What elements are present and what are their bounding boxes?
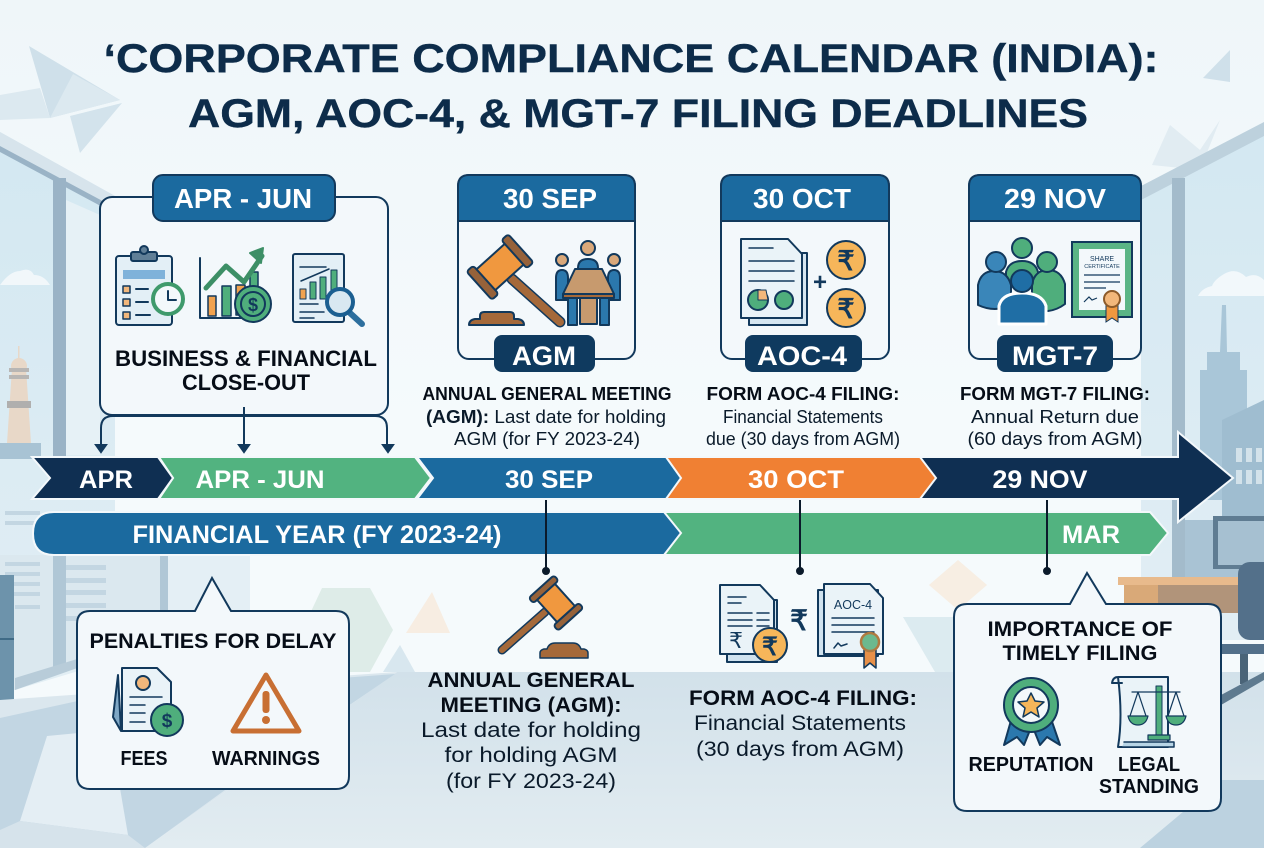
text: AOC-4 detail: Financial Statements bbox=[694, 712, 906, 735]
icon: plus and rupee coins: ₹ bbox=[837, 246, 855, 276]
arrows: close-out bracket to timeline bbox=[96, 407, 393, 452]
panel: business and financial close-out bbox=[100, 175, 388, 415]
icon: warning triangle bbox=[233, 675, 299, 731]
badge: AGM bbox=[494, 335, 595, 372]
panel: AOC-4 card bbox=[721, 175, 889, 372]
label: reputation: REPUTATION bbox=[968, 754, 1094, 776]
icon: share certificate: SHARE bbox=[1090, 256, 1114, 263]
heading: importance: IMPORTANCE OF bbox=[988, 618, 1173, 641]
text: MGT-7 description: (60 days from AGM) bbox=[968, 429, 1142, 449]
text: AOC-4 description: due (30 days from AGM) bbox=[706, 429, 900, 449]
segment: apr: APR bbox=[79, 466, 133, 494]
segment: 30 oct: 30 OCT bbox=[748, 466, 844, 494]
badge: AGM: AGM bbox=[512, 341, 576, 371]
lighthouse bbox=[7, 346, 31, 443]
text: AOC-4 description bbox=[706, 384, 900, 449]
panel: AGM card bbox=[458, 175, 635, 372]
icon: legal scales bbox=[1112, 677, 1186, 747]
left lower window bbox=[0, 555, 250, 690]
text: MGT-7 description: Annual Return due bbox=[971, 407, 1139, 427]
title bbox=[104, 37, 1158, 136]
icon: reputation badge bbox=[1004, 678, 1060, 745]
badge: AOC-4 bbox=[745, 335, 862, 372]
header: 30 sep bbox=[458, 175, 635, 221]
segment: 29 nov bbox=[920, 432, 1233, 522]
header: 30 oct: 30 OCT bbox=[753, 183, 851, 214]
icon: share certificate bbox=[1072, 242, 1132, 322]
label: warnings: WARNINGS bbox=[212, 748, 320, 770]
badge: MGT-7: MGT-7 bbox=[1012, 341, 1098, 371]
text: AGM detail bbox=[421, 669, 641, 793]
title: ‘CORPORATE COMPLIANCE CALENDAR (INDIA): bbox=[104, 37, 1158, 81]
text: AOC-4 detail: (30 days from AGM) bbox=[696, 738, 904, 761]
panel: MGT-7 card bbox=[969, 175, 1141, 372]
text: MGT-7 description bbox=[960, 384, 1150, 449]
segment: financial year: FINANCIAL YEAR (FY 2023-24) bbox=[132, 521, 502, 549]
icon: AOC-4 filing documents: ₹ bbox=[762, 633, 778, 661]
label: business and financial close-out bbox=[115, 346, 377, 395]
icon: financial statement pages bbox=[741, 239, 807, 325]
text: AGM detail: MEETING (AGM): bbox=[440, 694, 622, 717]
label: legal standing: STANDING bbox=[1099, 776, 1199, 798]
segment: 30 sep: 30 SEP bbox=[505, 466, 593, 494]
label: legal standing: LEGAL bbox=[1118, 754, 1180, 776]
segment: mar bbox=[664, 512, 1168, 555]
text: AGM detail: ANNUAL GENERAL bbox=[428, 669, 635, 692]
segment: apr-jun: APR - JUN bbox=[196, 466, 324, 494]
text: AGM description: AGM (for FY 2023-24) bbox=[454, 429, 640, 449]
icon: plus and rupee coins: + bbox=[813, 269, 827, 296]
segment: 30 oct bbox=[665, 457, 936, 499]
text: AOC-4 description: Financial Statements bbox=[723, 407, 883, 427]
connector: MGT-7 bbox=[1044, 500, 1050, 574]
callout: importance of timely filing bbox=[954, 573, 1221, 811]
connector: AGM bbox=[543, 500, 549, 574]
icon: report with magnifier bbox=[293, 254, 362, 324]
heading: importance: TIMELY FILING bbox=[1002, 642, 1158, 665]
right window bbox=[1141, 130, 1264, 640]
icon: AOC-4 filing documents: ₹ bbox=[729, 628, 743, 653]
icon: AOC-4 filing documents: AOC-4 bbox=[834, 598, 872, 612]
text: AGM detail: Last date for holding bbox=[421, 719, 641, 742]
header: 29 nov: 29 NOV bbox=[1004, 183, 1106, 214]
timeline: milestones arrow bbox=[32, 432, 1233, 522]
icon: plus and rupee coins bbox=[813, 241, 865, 327]
label: legal standing bbox=[1099, 754, 1199, 798]
icon: checklist with clock bbox=[116, 246, 183, 325]
icon: AOC-4 filing documents: ₹ bbox=[790, 605, 808, 636]
title: AGM, AOC-4, & MGT-7 FILING DEADLINES bbox=[188, 92, 1088, 136]
icon: plus and rupee coins: ₹ bbox=[837, 294, 855, 324]
connector: AOC-4 bbox=[797, 500, 803, 574]
icon: meeting table bbox=[556, 241, 620, 325]
text: AGM description: (AGM): Last date for holding bbox=[426, 407, 666, 427]
segment: 30 sep bbox=[417, 457, 681, 499]
segment: financial year bbox=[33, 512, 681, 555]
segment: apr bbox=[32, 457, 173, 499]
text: AGM description bbox=[422, 384, 672, 449]
text: MGT-7 description: FORM MGT-7 FILING: bbox=[960, 384, 1150, 404]
badge: MGT-7 bbox=[997, 335, 1113, 372]
header: apr-jun bbox=[153, 175, 335, 221]
label: business and financial close-out: BUSINESS & FINANCIAL bbox=[115, 346, 377, 371]
segment: 29 nov: 29 NOV bbox=[992, 466, 1088, 494]
header: apr-jun: APR - JUN bbox=[174, 183, 312, 214]
icon: growth chart with dollar coin bbox=[200, 248, 271, 322]
badge: AOC-4: AOC-4 bbox=[757, 341, 847, 371]
header: 29 nov bbox=[969, 175, 1141, 221]
central floor bbox=[145, 672, 1264, 848]
header: 30 oct bbox=[721, 175, 889, 221]
icon: AOC-4 filing documents bbox=[720, 584, 883, 668]
text: AGM description: ANNUAL GENERAL MEETING bbox=[422, 384, 672, 404]
text: AGM detail: (for FY 2023-24) bbox=[446, 770, 616, 793]
desk, monitor and chair bbox=[1213, 516, 1264, 569]
text: AOC-4 description: FORM AOC-4 FILING: bbox=[706, 384, 900, 404]
left window bbox=[0, 132, 115, 690]
icon: gavel bbox=[458, 234, 560, 325]
icon: fees document with dollar bbox=[113, 668, 183, 736]
heading: penalties: PENALTIES FOR DELAY bbox=[90, 630, 336, 653]
text: AGM detail: for holding AGM bbox=[444, 744, 618, 767]
heading: importance bbox=[988, 618, 1173, 665]
icon: AGM gavel bbox=[502, 575, 588, 658]
timeline: financial year bar bbox=[33, 512, 1168, 555]
header: 30 sep: 30 SEP bbox=[503, 183, 597, 214]
icon: shareholders group bbox=[978, 238, 1065, 324]
text: AOC-4 detail bbox=[689, 687, 917, 761]
label: business and financial close-out: CLOSE-OUT bbox=[182, 370, 311, 395]
segment: apr-jun bbox=[159, 457, 431, 499]
icon: growth chart with dollar coin: $ bbox=[248, 295, 258, 315]
text: AOC-4 detail: FORM AOC-4 FILING: bbox=[689, 687, 917, 710]
callout: penalties for delay bbox=[77, 578, 349, 789]
label: fees: FEES bbox=[120, 748, 168, 770]
icon: share certificate: CERTIFICATE bbox=[1084, 264, 1120, 270]
pale geometric shapes bbox=[307, 588, 393, 672]
segment: mar: MAR bbox=[1062, 521, 1120, 549]
icon: fees document with dollar: $ bbox=[162, 711, 173, 732]
